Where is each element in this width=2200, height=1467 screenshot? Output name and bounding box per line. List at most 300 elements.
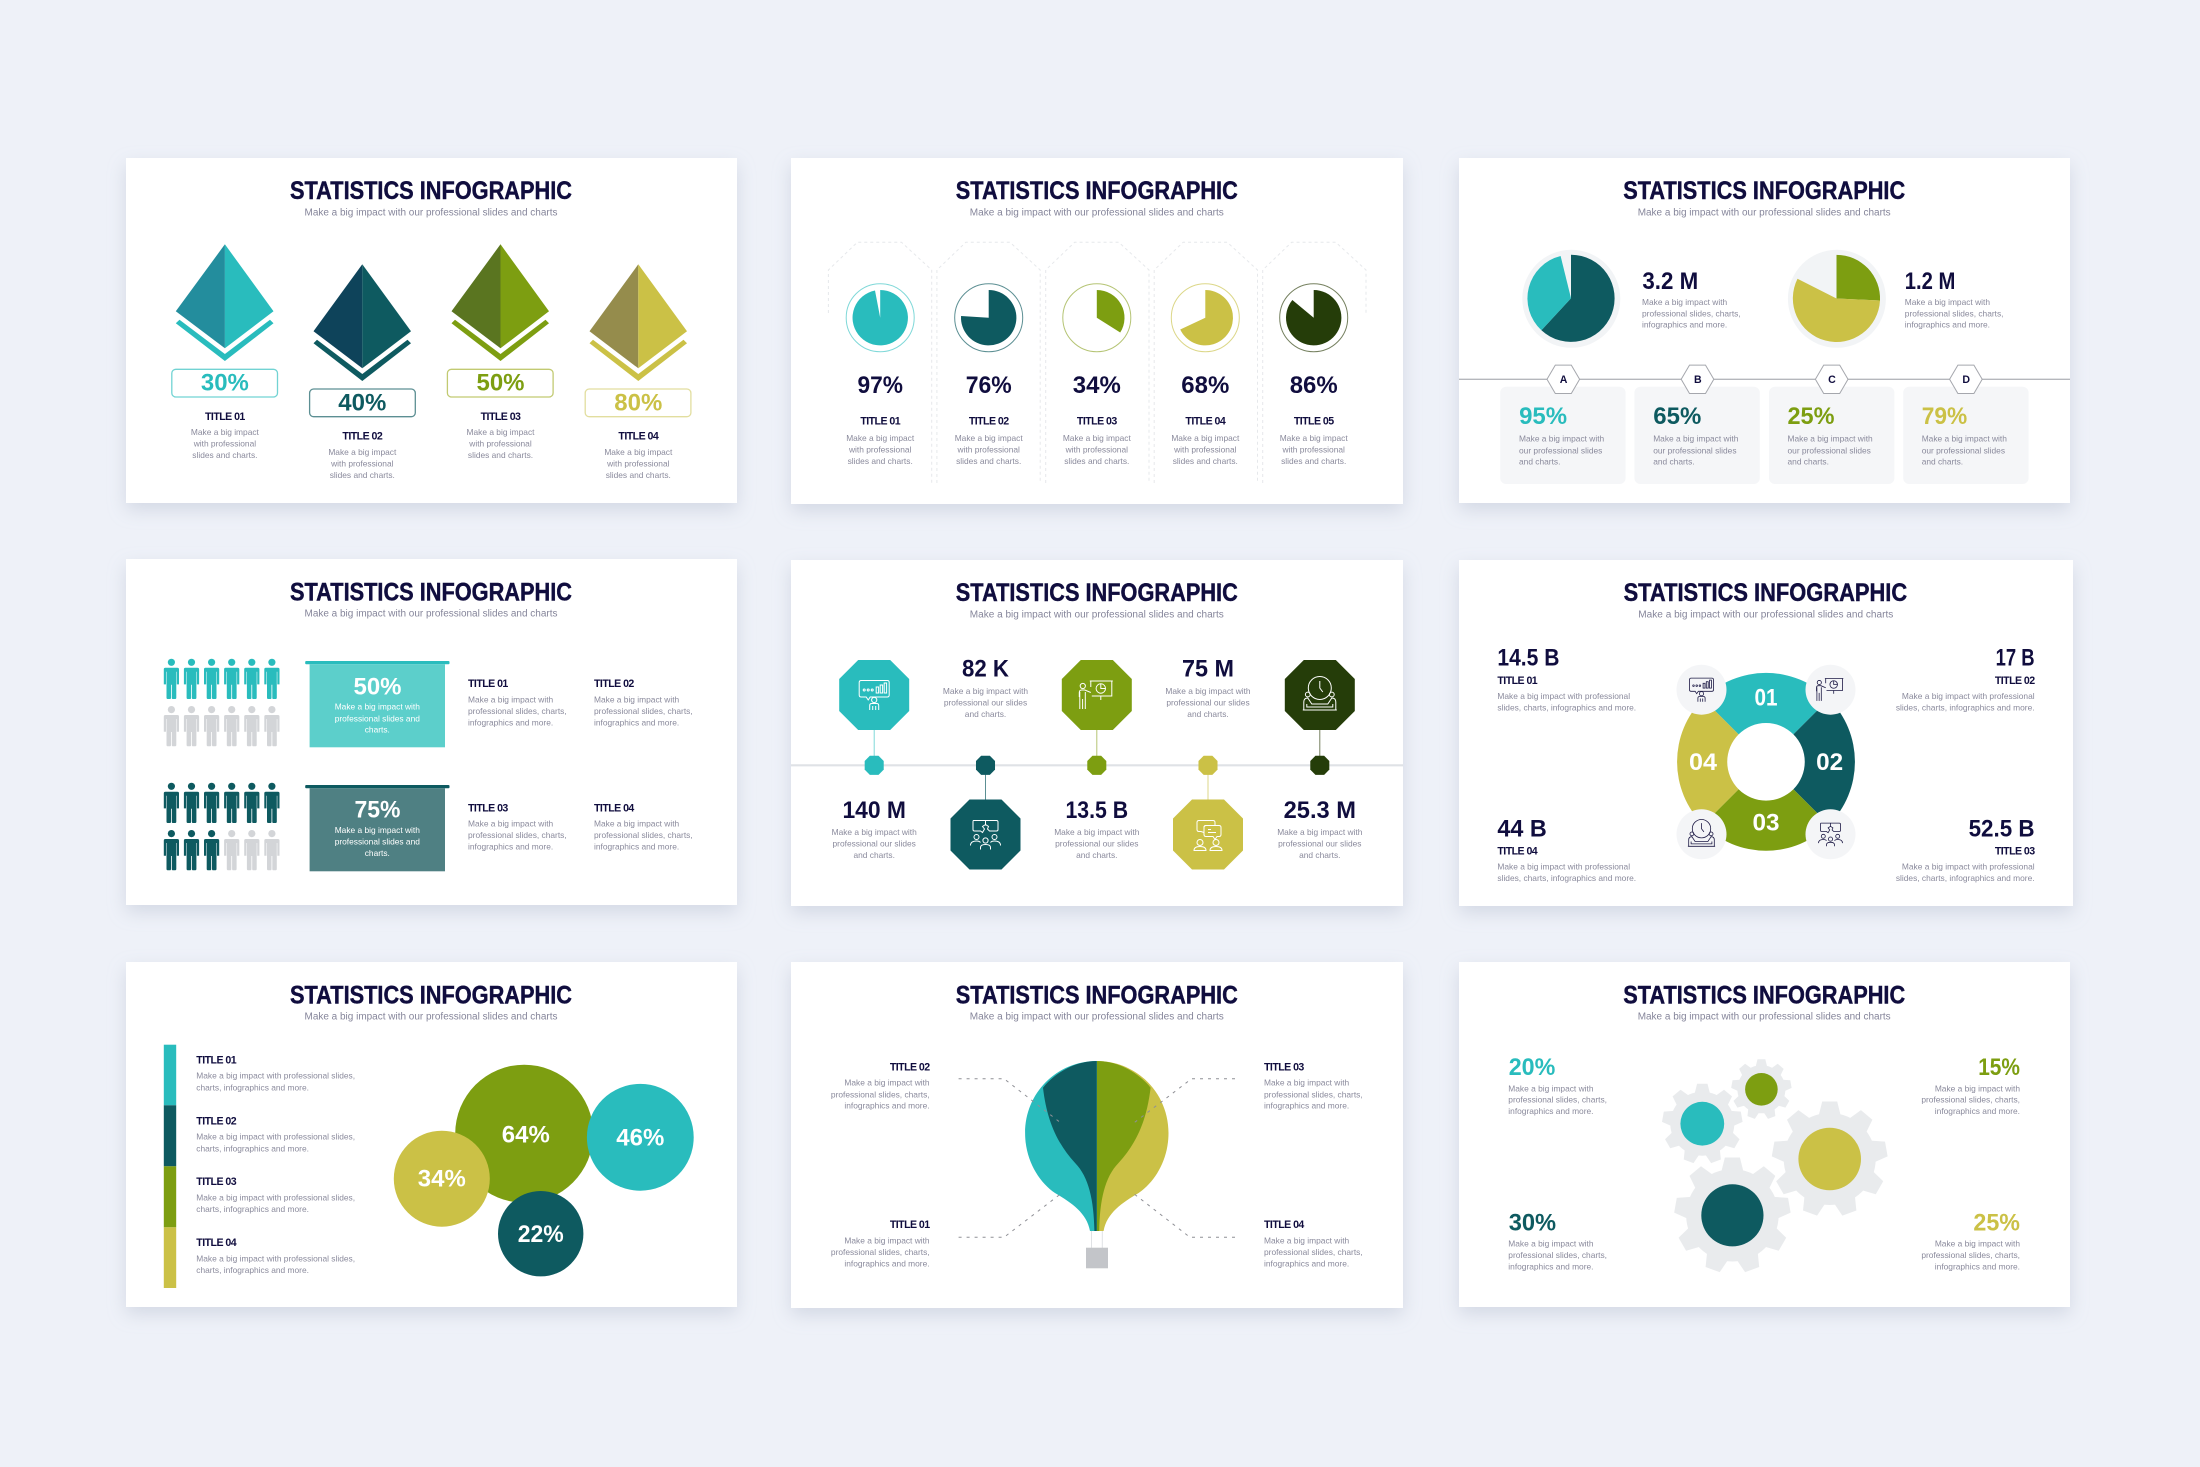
heading: STATISTICS INFOGRAPHIC [290,177,572,205]
stat 15%: infographics and more. [1935,1106,2020,1116]
divider line [1459,378,2070,380]
callout 75%: charts. [365,848,390,858]
title 01 text: TITLE 01 [196,1054,237,1066]
people chart 50% [164,659,280,746]
hexagon D: D [1962,374,1970,386]
title 04 text [604,431,673,480]
stat 25%: 25% [1973,1209,2020,1236]
balloon envelope [1025,1061,1168,1231]
title 01 text [468,678,567,727]
stat 25%: professional slides, charts, [1921,1250,2020,1260]
stat 25.3 M: 25.3 M [1284,797,1356,824]
title 03 text: charts, infographics and more. [196,1204,309,1214]
stat 25.3 M: Make a big impact with [1277,827,1363,837]
stat 44 B: slides, charts, infographics and more. [1497,873,1636,883]
stat 75 M: professional our slides [1166,698,1250,708]
stat 44 B: 44 B [1497,815,1547,842]
title 02 text [328,431,397,480]
title 01 text: Make a big impact with [468,694,554,704]
column 5 text: Make a big impact [1280,433,1348,443]
title 04 text: TITLE 04 [196,1237,237,1249]
card C: our professional slides [1788,445,1871,455]
title 02 text: professional slides, charts, [831,1089,930,1099]
hexagon A [1547,365,1580,393]
hexagon C [1815,365,1848,393]
stat 13.5 B: Make a big impact with [1054,827,1140,837]
card A: Make a big impact with [1519,434,1605,444]
title 04 text [1264,1219,1363,1268]
gear yellow [1771,1102,1888,1217]
icon: clock meeting [1676,809,1726,859]
stat 82 K: professional our slides [944,698,1027,708]
stat 82 K: 82 K [962,656,1010,683]
panel card [1459,962,2070,1307]
column 2 text: 76% [966,372,1012,399]
subheading: Make a big impact with our professional slides and charts [1638,1011,1891,1022]
node 1 [839,660,909,775]
stat 30%: professional slides, charts, [1508,1250,1607,1260]
heading: STATISTICS INFOGRAPHIC [1623,981,1905,1009]
column 5 text: 86% [1290,372,1338,399]
title 02 text [831,1061,930,1111]
column 2 text [955,372,1023,466]
panel: octagon timeline [791,560,1403,906]
stat 20%: infographics and more. [1508,1106,1594,1116]
hexagon D [1950,365,1982,393]
pie chart 3.2 M [1522,250,1620,348]
card A: our professional slides [1519,445,1602,455]
icon: chart board [1806,665,1856,715]
balloon ropes and basket [1086,1231,1108,1268]
stat 140 M: 140 M [842,797,906,824]
stat 17 B: Make a big impact with professional [1902,691,2035,701]
title 03 text: Make a big impact with professional slides, [196,1192,355,1202]
panel: pyramid percentages [126,158,737,503]
column 1 text [846,372,915,466]
card B: 65% [1653,403,1701,430]
title 03 text: infographics and more. [1264,1101,1349,1111]
stat 1.2 M: professional slides, charts, [1905,308,2003,318]
card A [1500,387,1626,484]
stat 13.5 B: 13.5 B [1065,797,1128,824]
hexagon A: A [1560,374,1568,386]
ring chart: 01 [1754,685,1778,712]
value box 4 [585,389,691,417]
title 02 text: slides and charts. [330,470,395,480]
title 03 text: TITLE 03 [468,802,508,814]
stat 25%: infographics and more. [1935,1261,2020,1271]
title 01 text: TITLE 01 [205,411,245,423]
title 04 text: Make a big impact with [594,818,680,828]
panel: gears [1459,962,2070,1307]
title 01 text [196,1054,355,1092]
stat 1.2 M: infographics and more. [1905,320,1990,330]
panel: pies and lettered cards [1459,158,2070,503]
pie 34% [1063,284,1131,352]
card D [1903,387,2029,484]
value box 2: 40% [338,389,386,416]
card A: 95% [1519,403,1567,430]
stat 17 B: slides, charts, infographics and more. [1896,703,2035,713]
panel: people pictograms [126,559,737,905]
stat 14.5 B: Make a big impact with professional [1497,691,1630,701]
column 3 text: with professional [1065,445,1128,455]
column 1 text: 97% [857,372,903,399]
title 04 text: TITLE 04 [1264,1219,1304,1231]
dashed leader lines [959,1079,1235,1237]
stat 44 B: TITLE 04 [1497,846,1538,858]
title 03 text: Make a big impact with [468,818,554,828]
column 1 text: slides and charts. [848,456,913,466]
title 01 text [191,411,260,460]
stat 13.5 B: professional our slides [1055,839,1138,849]
stat 14.5 B: 14.5 B [1497,645,1559,672]
title 04 text: TITLE 04 [618,431,659,443]
title 03 text [468,802,567,851]
stat 30% [1508,1209,1607,1271]
bubble 64%: 64% [502,1122,550,1149]
stat 25%: Make a big impact with [1935,1238,2020,1248]
callout 50%: professional slides and [335,713,420,723]
panel card [791,560,1403,906]
title 02 text: infographics and more. [844,1101,930,1111]
card D: and charts. [1922,457,1963,467]
stat 52.5 B: slides, charts, infographics and more. [1896,873,2035,883]
title 03 text: slides and charts. [468,450,533,460]
column 5 text: TITLE 05 [1294,416,1334,428]
stat 20% [1508,1054,1607,1116]
card A: and charts. [1519,457,1560,467]
column 4 text: with professional [1173,445,1237,455]
title 02 text: with professional [330,459,394,469]
value box 2 [310,389,415,417]
heading: STATISTICS INFOGRAPHIC [290,981,572,1009]
bubble 46% [587,1084,694,1191]
hexagon C: C [1828,374,1836,386]
pie 97% [846,284,914,352]
title 02 text: TITLE 02 [342,431,383,443]
stat 75 M [1165,656,1251,719]
title 01 text: charts, infographics and more. [196,1082,309,1092]
title 04 text: professional slides, charts, [594,830,693,840]
title 04 text: Make a big impact with [1264,1235,1350,1245]
stat 82 K [943,656,1028,719]
subheading: Make a big impact with our professional slides and charts [304,208,558,218]
stat 25.3 M [1277,797,1363,860]
title 02 text: Make a big impact with professional slides, [196,1132,355,1142]
ring chart: 03 [1752,809,1780,836]
stat 1.2 M: 1.2 M [1905,268,1955,295]
heading: STATISTICS INFOGRAPHIC [956,177,1238,205]
timeline line [791,764,1403,766]
title 02 text [196,1115,355,1153]
stat 15% [1921,1054,2020,1116]
title 03 text [467,411,535,460]
title 04 text: professional slides, charts, [1264,1247,1363,1257]
title 03 text: with professional [468,439,532,449]
title 03 text: TITLE 03 [1264,1061,1304,1073]
gear dark teal [1674,1158,1791,1273]
title 02 text: Make a big impact with [594,694,680,704]
ring chart: 02 [1816,749,1843,776]
stat 75 M: and charts. [1187,709,1229,719]
heading: STATISTICS INFOGRAPHIC [1624,579,1907,607]
title 01 text: infographics and more. [468,717,553,727]
value box 3: 50% [476,370,524,397]
stat 82 K: Make a big impact with [943,686,1028,696]
stat 17 B [1896,645,2035,713]
heading: STATISTICS INFOGRAPHIC [956,579,1238,607]
subheading: Make a big impact with our professional slides and charts [304,608,558,620]
dashed column frames [828,242,1366,483]
panel card [791,962,1403,1308]
panel card [126,158,737,503]
title 02 text: infographics and more. [594,717,679,727]
stacked colour bar [164,1045,176,1288]
title 03 text [1264,1061,1363,1111]
stat 140 M: Make a big impact with [832,827,917,837]
title 01 text: with professional [193,439,256,449]
heading: STATISTICS INFOGRAPHIC [290,578,572,606]
title 03 text: TITLE 03 [481,411,521,423]
stat 82 K: and charts. [965,709,1006,719]
card D: 79% [1922,403,1967,430]
stat 15%: professional slides, charts, [1921,1095,2020,1105]
column 4 text: TITLE 04 [1185,416,1226,428]
column 3 text: slides and charts. [1064,456,1129,466]
title 02 text: TITLE 02 [890,1061,930,1073]
column 1 text: with professional [848,445,912,455]
card C [1769,387,1894,484]
bubble 34% [394,1131,490,1227]
title 01 text: infographics and more. [844,1258,930,1268]
title 04 text: TITLE 04 [594,802,634,814]
title 03 text: Make a big impact [467,427,535,437]
stat 140 M: professional our slides [833,839,916,849]
stat 20%: 20% [1509,1054,1555,1081]
title 01 text [831,1219,930,1268]
panel card [126,559,737,905]
heading: STATISTICS INFOGRAPHIC [1623,177,1905,205]
stat 14.5 B: slides, charts, infographics and more. [1497,703,1636,713]
column 3 text: TITLE 03 [1077,416,1117,428]
stat 20%: professional slides, charts, [1508,1095,1607,1105]
subheading: Make a big impact with our professional slides and charts [1638,609,1893,620]
callout 50%: charts. [365,725,390,735]
value box 3 [447,369,553,397]
card B [1634,387,1760,484]
card B: and charts. [1653,457,1695,467]
subheading: Make a big impact with our professional slides and charts [970,208,1224,218]
column 5 text [1280,372,1348,466]
stat 75 M: 75 M [1182,656,1234,683]
column 1 text: TITLE 01 [860,416,901,428]
stat 44 B [1497,815,1636,883]
panel card [1459,560,2073,906]
column 3 text [1063,372,1131,466]
callout 50%: Make a big impact with [335,702,420,712]
stat 3.2 M [1642,268,1741,330]
stat 52.5 B [1896,815,2035,883]
value box 4: 80% [614,389,662,416]
column 4 text: Make a big impact [1171,433,1240,443]
column 5 text: with professional [1282,445,1345,455]
panel card [791,158,1403,504]
node 5 [1285,660,1355,775]
stat 52.5 B: 52.5 B [1969,815,2035,842]
title 03 text: TITLE 03 [196,1176,237,1188]
bubble 22% [498,1191,583,1276]
column 2 text: with professional [957,445,1020,455]
stat 1.2 M [1905,268,2003,330]
heading: STATISTICS INFOGRAPHIC [956,981,1238,1009]
stat 3.2 M: professional slides, charts, [1642,308,1741,318]
card B: our professional slides [1653,445,1737,455]
value box 1 [172,369,278,397]
panel: pie percent columns [791,158,1403,504]
stat 15%: 15% [1978,1054,2020,1081]
pyramid 1 [176,244,274,361]
title 04 text: Make a big impact [604,447,673,457]
stat 3.2 M: infographics and more. [1642,320,1727,330]
panel card [1459,158,2070,503]
column 4 text [1171,372,1240,466]
column 2 text: Make a big impact [955,433,1023,443]
column 3 text: Make a big impact [1063,433,1131,443]
stat 13.5 B: and charts. [1076,850,1118,860]
stat 15%: Make a big impact with [1935,1083,2020,1093]
gear teal [1662,1084,1743,1164]
panel: hot air balloon [791,962,1403,1308]
title 03 text: professional slides, charts, [1264,1089,1363,1099]
callout 75%: 75% [354,797,400,824]
panel: bubble chart [126,962,737,1307]
stat 30%: infographics and more. [1508,1261,1594,1271]
subheading: Make a big impact with our professional slides and charts [970,609,1224,620]
node 2 [950,756,1020,870]
column 2 text: slides and charts. [956,456,1021,466]
subheading: Make a big impact with our professional slides and charts [304,1011,558,1022]
card D: our professional slides [1922,445,2005,455]
stat 140 M: and charts. [853,850,895,860]
icon: presenter [1676,665,1726,715]
people chart 75% [164,783,280,870]
stat 25% [1921,1209,2020,1271]
stat 14.5 B [1497,645,1636,713]
title 04 text: infographics and more. [1264,1258,1349,1268]
callout 75%: Make a big impact with [335,825,420,835]
bubble 46%: 46% [616,1124,664,1151]
title 01 text: professional slides, charts, [468,706,567,716]
stat 14.5 B: TITLE 01 [1497,675,1538,687]
title 03 text: Make a big impact with [1264,1078,1350,1088]
node 4 [1173,756,1243,870]
title 02 text: charts, infographics and more. [196,1143,309,1153]
stat 1.2 M: Make a big impact with [1905,297,1990,307]
title 03 text: professional slides, charts, [468,830,567,840]
panel card [126,962,737,1307]
callout 75% [305,785,450,871]
stat 13.5 B [1054,797,1140,860]
stat 17 B: 17 B [1996,645,2035,672]
card B: Make a big impact with [1653,434,1739,444]
title 01 text: Make a big impact with professional slides, [196,1071,355,1081]
node 3 [1062,660,1132,775]
pie 76% [955,284,1023,352]
callout 50%: 50% [354,673,402,700]
title 04 text: infographics and more. [594,841,679,851]
callout 75%: professional slides and [335,837,420,847]
callout 50% [305,661,450,747]
title 02 text: professional slides, charts, [594,706,693,716]
title 02 text: Make a big impact with [844,1078,930,1088]
subheading: Make a big impact with our professional slides and charts [970,1011,1224,1022]
column 3 text: 34% [1073,372,1121,399]
subheading: Make a big impact with our professional slides and charts [1638,208,1891,218]
bubble 22%: 22% [518,1221,564,1248]
stat 25.3 M: professional our slides [1278,839,1361,849]
title 04 text: with professional [606,459,670,469]
card C: Make a big impact with [1788,434,1873,444]
stat 44 B: Make a big impact with professional [1497,862,1630,872]
stat 17 B: TITLE 02 [1995,675,2035,687]
bubble 64% [455,1065,593,1203]
pyramid 3 [452,244,549,361]
stat 75 M: Make a big impact with [1165,686,1251,696]
stat 30%: 30% [1509,1209,1556,1236]
hexagon B: B [1694,374,1702,386]
column 1 text: Make a big impact [846,433,915,443]
card D: Make a big impact with [1922,434,2007,444]
card C: 25% [1788,403,1834,430]
column 2 text: TITLE 02 [969,416,1009,428]
title 01 text: slides and charts. [192,450,257,460]
title 02 text: Make a big impact [328,447,397,457]
title 03 text [196,1176,355,1214]
title 04 text: slides and charts. [606,470,671,480]
title 04 text [196,1237,355,1275]
title 01 text: TITLE 01 [468,678,508,690]
panel: segmented ring [1459,560,2073,906]
stat 25.3 M: and charts. [1299,850,1341,860]
bubble 34%: 34% [418,1166,466,1193]
pie 68% [1171,284,1239,352]
title 03 text: infographics and more. [468,841,553,851]
stat 3.2 M: 3.2 M [1642,268,1698,295]
column 5 text: slides and charts. [1281,456,1346,466]
pie 86% [1280,284,1348,352]
title 01 text: TITLE 01 [890,1219,930,1231]
title 01 text: Make a big impact with [844,1235,930,1245]
title 01 text: professional slides, charts, [831,1247,930,1257]
title 02 text: TITLE 02 [196,1115,237,1127]
stat 52.5 B: TITLE 03 [1995,846,2035,858]
pie chart 1.2 M [1788,250,1886,348]
stat 30%: Make a big impact with [1508,1238,1594,1248]
pyramid 2 [314,264,411,381]
card C: and charts. [1788,457,1829,467]
value box 1: 30% [201,370,249,397]
title 04 text: Make a big impact with professional slides, [196,1253,355,1263]
hexagon B [1681,365,1714,393]
stat 3.2 M: Make a big impact with [1642,297,1728,307]
column 4 text: 68% [1181,372,1229,399]
icon: team [1806,809,1856,859]
stat 140 M [832,797,917,860]
gear green [1731,1059,1792,1119]
pyramid 4 [590,264,687,381]
title 04 text [594,802,693,851]
